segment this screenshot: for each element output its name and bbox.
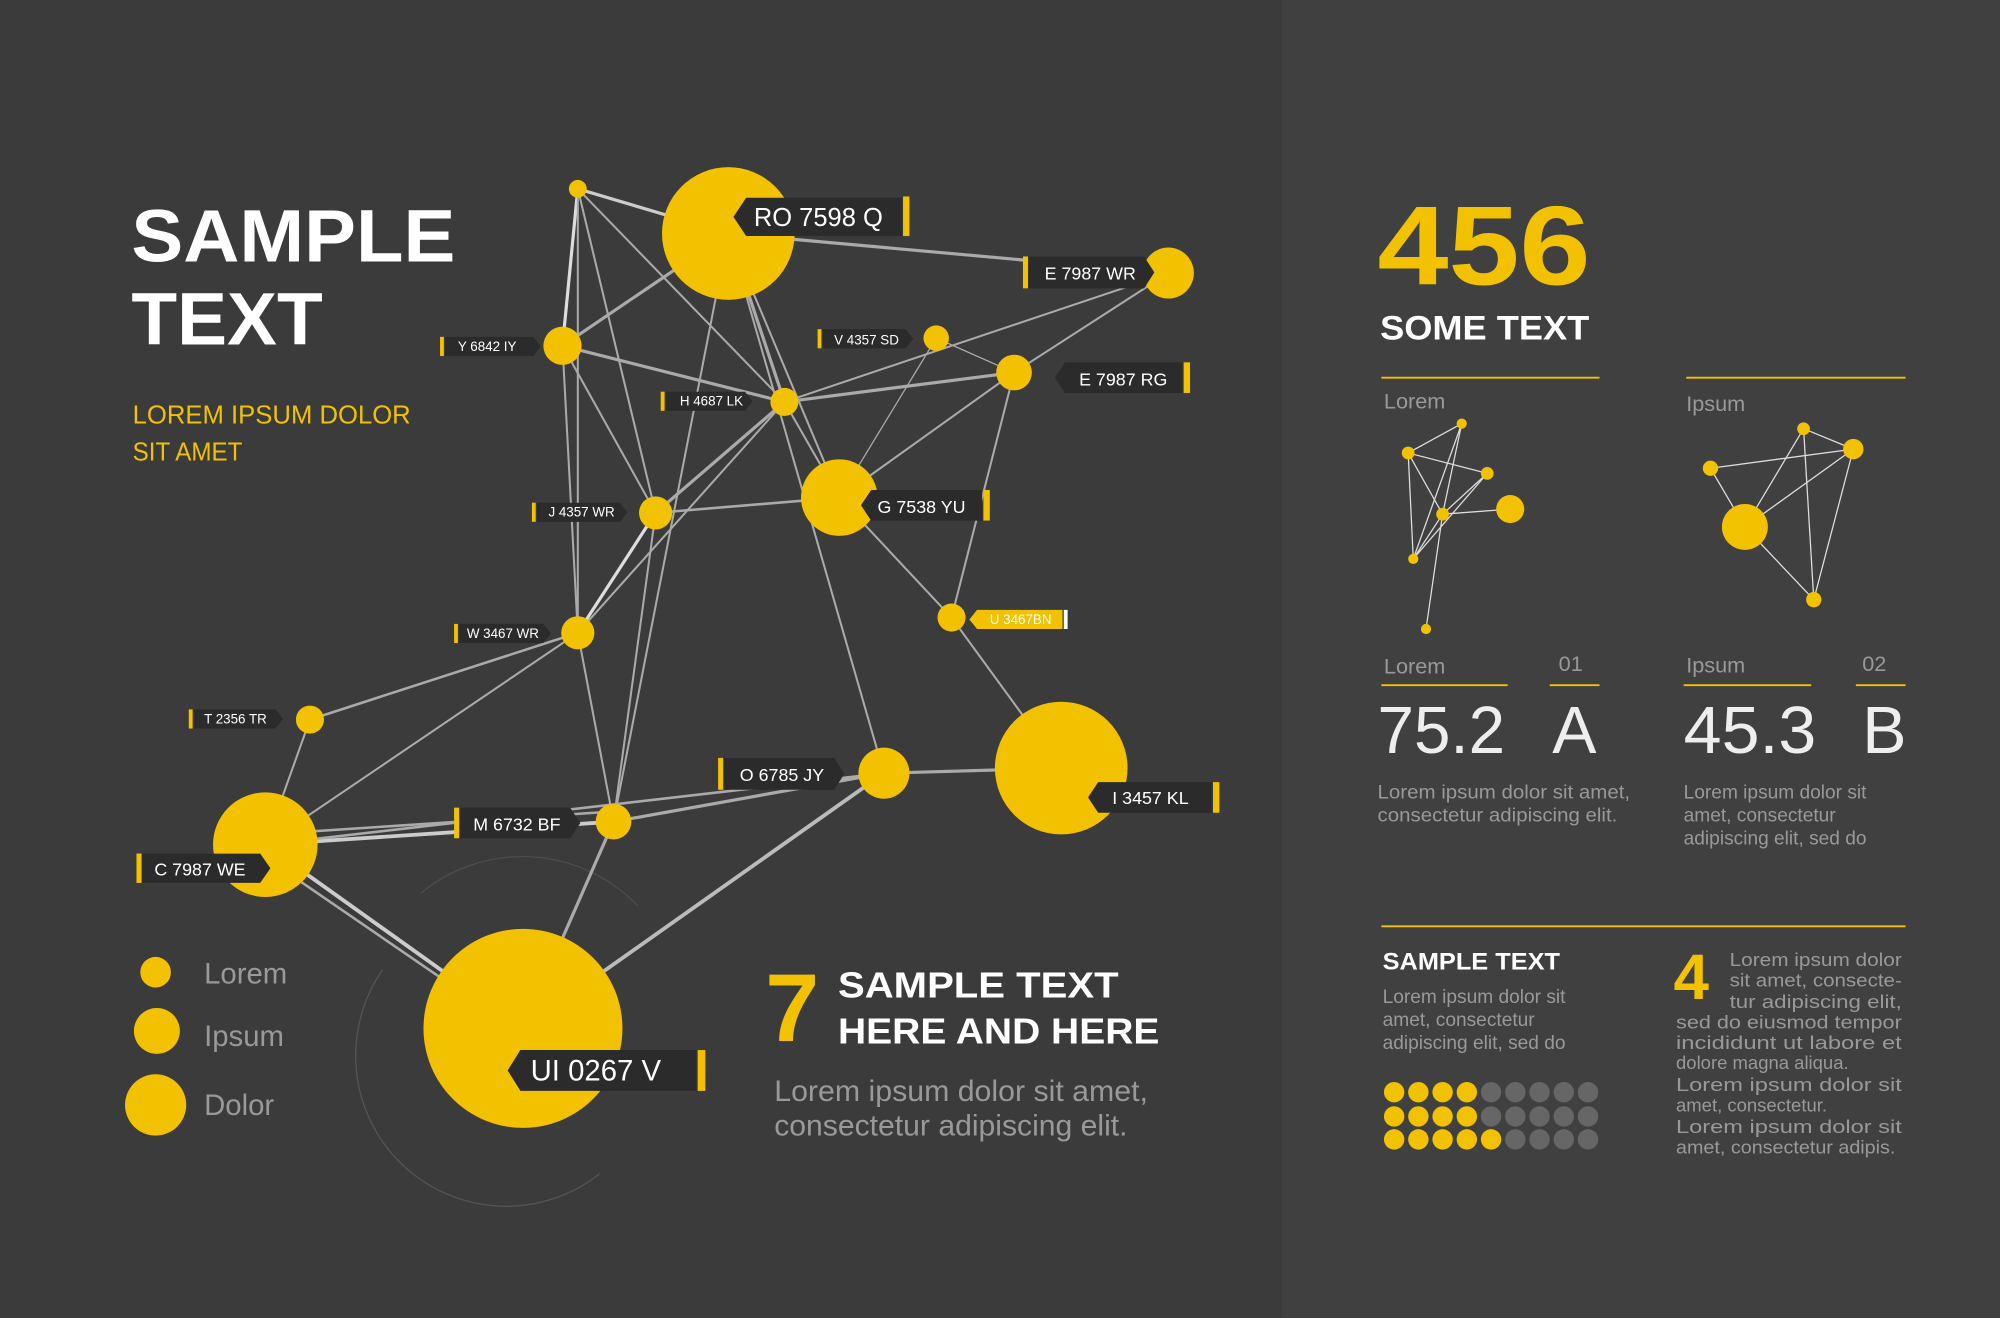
node labels: H 4687 LK — [680, 394, 743, 409]
numbered paragraph 4: incididunt ut labore et — [1676, 1032, 1902, 1053]
stat B — [1684, 651, 1906, 850]
node labels: C 7987 WE — [154, 859, 246, 879]
stat B: Lorem ipsum dolor sit — [1684, 783, 1867, 804]
sample text block: Lorem ipsum dolor sit — [1383, 987, 1566, 1008]
numbered paragraph 4: Lorem ipsum dolor sit — [1676, 1116, 1902, 1137]
node labels: U 3467BN — [990, 612, 1052, 627]
node labels: E 7987 WR — [1045, 263, 1136, 283]
dot matrix chart — [1384, 1082, 1598, 1150]
stat B: B — [1862, 694, 1906, 768]
legend: Dolor — [204, 1089, 274, 1122]
node labels: UI 0267 V — [531, 1055, 661, 1088]
network nodes — [213, 167, 1194, 1128]
node labels: W 3467 WR — [467, 626, 539, 641]
node labels: RO 7598 Q — [754, 204, 883, 232]
mini network 2 — [1686, 391, 1864, 607]
stat B: amet, consectetur — [1684, 806, 1836, 827]
sample text block — [1383, 949, 1566, 1054]
subtitle — [133, 402, 411, 467]
callout: 7 sample text: SAMPLE TEXT — [838, 966, 1119, 1006]
node labels: E 7987 RG — [1079, 369, 1167, 389]
node labels — [136, 196, 1219, 1091]
numbered paragraph 4: amet, consectetur adipis. — [1676, 1136, 1895, 1157]
stat B: 45.3 — [1684, 694, 1816, 768]
stat A: 75.2 — [1378, 694, 1505, 768]
sample text block: SAMPLE TEXT — [1383, 949, 1560, 976]
sample text block: amet, consectetur — [1383, 1010, 1535, 1031]
callout: 7 sample text: Lorem ipsum dolor sit amet, — [774, 1075, 1148, 1108]
stat B: 02 — [1862, 651, 1886, 676]
callout: 7 sample text — [765, 953, 1159, 1143]
callout: 7 sample text: HERE AND HERE — [838, 1012, 1159, 1052]
numbered paragraph 4: 4 — [1673, 941, 1709, 1013]
numbered paragraph 4: amet, consectetur. — [1676, 1094, 1827, 1115]
numbered paragraph 4: tur adipiscing elit, — [1730, 991, 1902, 1012]
stat A: A — [1552, 694, 1597, 768]
stat A — [1378, 651, 1630, 827]
node labels: J 4357 WR — [548, 505, 615, 520]
callout: 7 sample text: 7 — [765, 953, 819, 1062]
legend: Ipsum — [204, 1020, 284, 1053]
numbered paragraph 4: sit amet, consecte- — [1730, 969, 1902, 990]
node labels: T 2356 TR — [204, 711, 267, 726]
node labels: V 4357 SD — [834, 332, 899, 347]
node labels: M 6732 BF — [473, 815, 561, 835]
stat A: Lorem ipsum dolor sit amet, — [1378, 783, 1630, 804]
legend: Lorem — [204, 958, 287, 991]
node labels: Y 6842 IY — [458, 339, 516, 354]
network edges — [265, 189, 1168, 1028]
title: TEXT — [131, 277, 323, 360]
title — [131, 195, 455, 360]
title: SAMPLE — [131, 195, 455, 278]
stat A: consectetur adipiscing elit. — [1378, 806, 1617, 827]
legend — [125, 957, 287, 1136]
decorative arcs — [356, 857, 638, 1206]
numbered paragraph 4: Lorem ipsum dolor — [1730, 949, 1902, 970]
big number 456 — [1378, 183, 1591, 347]
stat B: Ipsum — [1686, 652, 1745, 677]
big number 456: 456 — [1378, 183, 1591, 309]
numbered paragraph 4: sed do eiusmod tempor — [1676, 1011, 1902, 1032]
subtitle: LOREM IPSUM DOLOR — [133, 402, 411, 430]
subtitle: SIT AMET — [133, 439, 242, 467]
stat A: Lorem — [1384, 654, 1445, 679]
callout: 7 sample text: consectetur adipiscing elit. — [774, 1110, 1128, 1143]
numbered paragraph 4: Lorem ipsum dolor sit — [1676, 1074, 1902, 1095]
stat A: 01 — [1559, 651, 1583, 676]
big number 456: SOME TEXT — [1380, 309, 1589, 347]
node labels: I 3457 KL — [1112, 788, 1189, 808]
numbered paragraph 4: dolore magna aliqua. — [1676, 1052, 1849, 1073]
sample text block: adipiscing elit, sed do — [1383, 1033, 1566, 1054]
stat B: adipiscing elit, sed do — [1684, 829, 1867, 850]
mini network 2: Ipsum — [1686, 391, 1745, 416]
numbered paragraph 4 — [1673, 941, 1902, 1157]
mini network 1: Lorem — [1384, 388, 1445, 413]
node labels: O 6785 JY — [740, 765, 824, 785]
node labels: G 7538 YU — [878, 497, 966, 517]
mini network 1 — [1384, 388, 1524, 634]
